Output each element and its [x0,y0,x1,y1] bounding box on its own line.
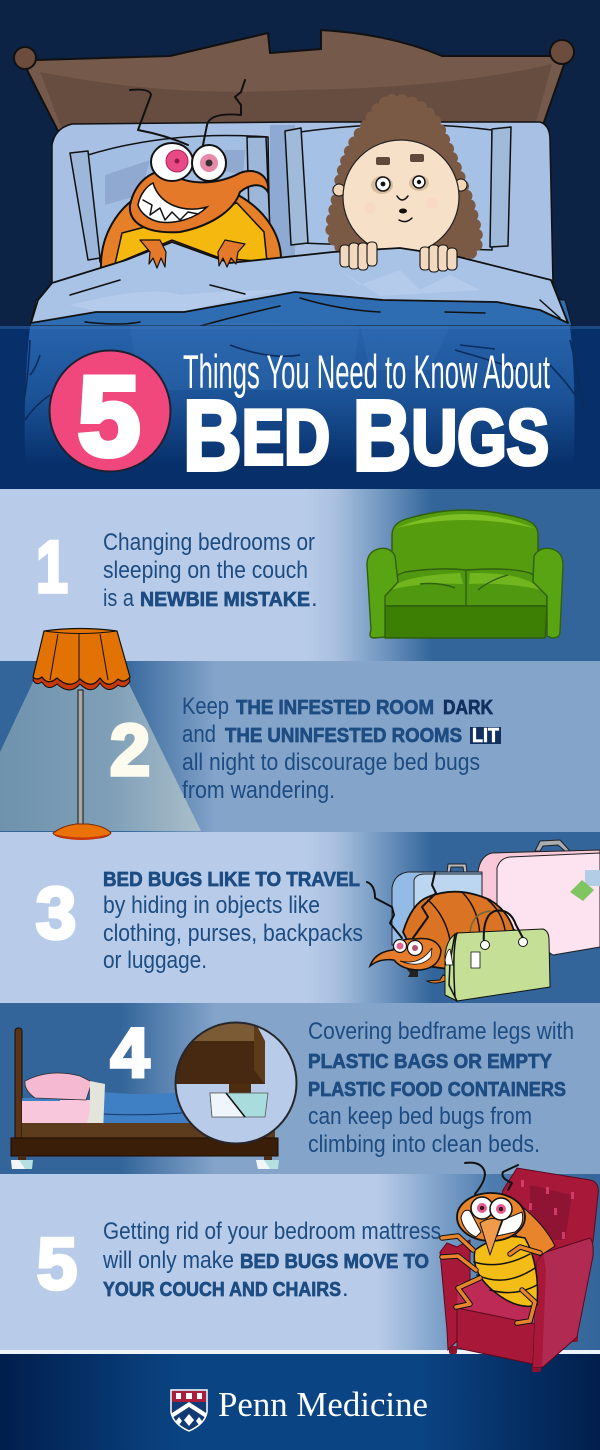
tip 1 text: is a [103,585,135,612]
bed pillow [25,1073,92,1100]
tip 3 text: BED BUGS LIKE TO TRAVEL [103,869,360,891]
lamp shade [33,628,130,684]
blue suitcase [392,864,482,945]
shade rim and pleats [44,631,117,680]
couch back highlight [396,514,534,528]
title: Bed Bugs: B [330,380,411,492]
tip 5 text: . [342,1275,349,1302]
couch left arm [367,548,398,638]
cushion highlights [390,573,542,590]
pink suitcase [478,840,600,955]
tip 2 number: 2 [110,710,150,791]
tip 3 number: 3 [36,873,76,954]
illustration: green couch [367,510,563,638]
bug in bed [101,80,281,268]
logo: Penn Medicine [171,1385,428,1431]
panel: title band background [0,326,600,489]
lamp pole [78,690,83,824]
tip 1 text: Changing bedrooms or [103,529,315,556]
man hands [340,242,457,272]
tip 3 text: clothing, purses, backpacks [103,920,363,947]
title: Bed Bugs: B [183,380,242,492]
tip 2 light beam [0,682,201,831]
panel: tip 4 background [0,1003,600,1174]
tip 3 text: by hiding in objects like [103,892,320,919]
tip 2 text: Keep [182,693,229,720]
orange bug [367,872,515,983]
green tag [570,880,594,901]
tip 5 text: BED BUGS MOVE TO [240,1251,429,1273]
badge: number 5 circle [50,350,170,479]
tip 3 text [103,869,363,974]
tip 4 text: PLASTIC FOOD CONTAINERS [308,1079,566,1101]
title: Bed Bugs: UGS [411,393,549,481]
chair right arm [533,1238,593,1367]
illustration: bed side view [11,1028,279,1169]
tip 1 text: . [311,585,318,612]
folded sheet [85,1081,105,1132]
bug claws [140,240,245,268]
sheet shading [70,270,480,311]
tip 5 text: will only make [102,1247,234,1274]
illustration: blanket lower part behind title [0,323,600,489]
chair feet [449,1334,578,1372]
tip 4 text: can keep bed bugs from [308,1103,532,1130]
tip 2 text: THE UNINFESTED ROOMS [225,725,462,747]
tip 2 text: THE INFESTED ROOM [236,697,434,719]
tip 2 text: DARK [443,697,493,719]
title: Bed Bugs: ED [242,393,330,481]
tip 4 number: 4 [111,1014,150,1092]
chair back [490,1168,598,1290]
panel: footer background [0,1354,600,1450]
bed frame [22,1123,275,1138]
tip 2 text [182,693,501,804]
lamp base shadow [54,834,110,840]
couch back [392,510,538,585]
lit highlight: LIT [472,725,499,747]
left pillow [70,135,271,262]
bed mattress [22,1100,92,1123]
tip 3 text: or luggage. [103,947,207,974]
illustration: luggage and bug [367,840,600,1001]
couch right arm [533,548,563,638]
tip 5 number: 5 [37,1224,77,1305]
illustration: bed with bug and man [14,30,574,326]
tip 2 text: and [182,721,216,748]
tip 1 text: sleeping on the couch [103,557,308,584]
magnifier circle: bedframe leg in plastic container [170,1020,296,1144]
bug on chair [442,1163,555,1323]
blue blanket [30,285,572,326]
tip 5 text [102,1218,441,1302]
panel: tip 5 background [0,1174,600,1350]
tip 1 text: NEWBIE MISTAKE [140,589,310,611]
bed post [15,1028,22,1140]
blanket wrinkles [70,280,560,326]
right pillow [285,124,511,250]
tufted back detail [530,1185,572,1240]
plastic containers on legs [11,1160,33,1169]
green bag [445,911,550,1001]
wordmark: Penn Medicine [218,1385,428,1424]
tip 2 text: from wandering. [182,777,335,804]
panel: tip 3 background [0,832,600,1003]
headboard [14,30,574,135]
tip 4 text [308,1018,574,1158]
tip 1 number: 1 [36,527,68,608]
bed blanket [103,1092,200,1132]
illustration: floor lamp [33,628,130,840]
seat cushions [384,569,547,606]
shield [171,1390,207,1431]
tip 1 text [103,529,318,612]
tip 4 text: climbing into clean beds. [308,1131,540,1158]
eiffel sticker [585,870,600,886]
lamp base [53,824,111,839]
cushion creases [420,575,508,590]
light sheet fold [31,242,568,323]
chair cushion [457,1278,535,1326]
chair left arm [440,1240,470,1350]
couch base [385,606,547,638]
tip 4 text: PLASTIC BAGS OR EMPTY [308,1051,553,1073]
white footer divider [0,1350,600,1354]
tip 5 text: Getting rid of your bedroom mattress [103,1218,441,1245]
panel: tip 1 background [0,489,600,661]
big five: 5 [78,354,140,479]
chair front [457,1308,535,1364]
tip 2 text: all night to discourage bed bugs [182,749,480,776]
sheet shadow [270,125,295,275]
man in bed [331,100,477,255]
illustration: red armchair with bug [440,1163,598,1372]
panel: night sky header background [0,0,600,326]
panel: tip 2 background [0,661,600,832]
lamp shade red trim [33,640,130,690]
tip 5 text: YOUR COUCH AND CHAIRS [103,1279,341,1301]
mattress and sheet [52,122,553,290]
